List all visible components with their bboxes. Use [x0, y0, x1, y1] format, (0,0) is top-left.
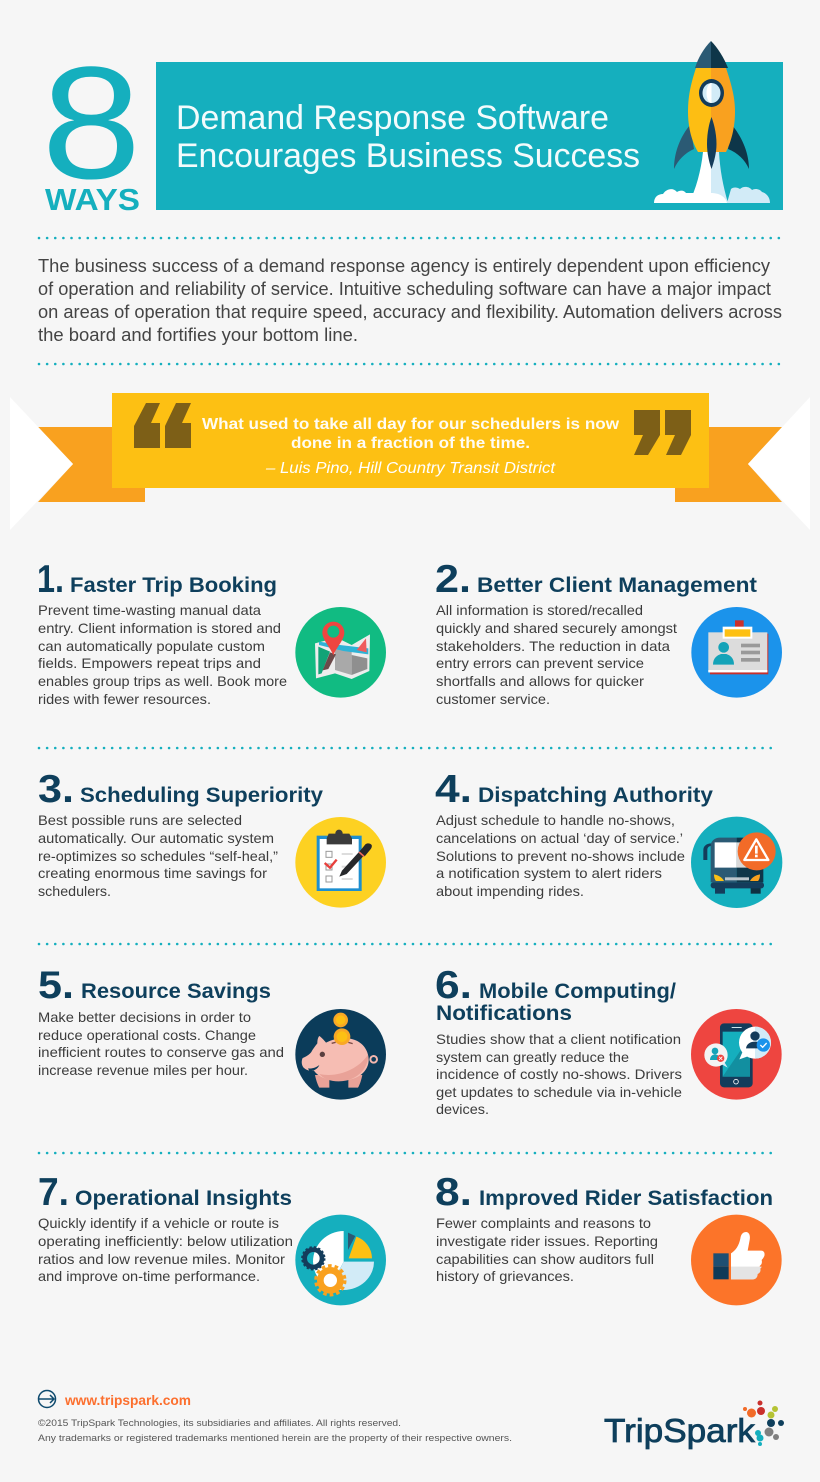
heading: Scheduling Superiority: [80, 783, 323, 807]
section 8: Improved Rider Satisfaction: [435, 1171, 782, 1305]
heading: Dispatching Authority: [478, 783, 713, 807]
body text: Fewer complaints and reasons to: [436, 1215, 651, 1231]
section 5: Resource Savings: [38, 964, 386, 1100]
body text: devices.: [436, 1101, 489, 1117]
section 3: Scheduling Superiority: [38, 768, 386, 908]
icon: clipboard and pen: [295, 817, 386, 908]
body text: [38, 1215, 293, 1284]
heading: Improved Rider Satisfaction: [479, 1186, 773, 1210]
icon: thumbs up: [691, 1215, 782, 1305]
title banner: Demand Response Software: [176, 99, 609, 137]
body text: Make better decisions in order to: [38, 1009, 251, 1025]
body text: inefficient routes to conserve gas and: [38, 1044, 284, 1060]
body text: system can greatly reduce the: [436, 1049, 629, 1065]
copyright text: Any trademarks or registered trademarks mentioned herein are the property of their respective owners.: [38, 1433, 512, 1444]
heading: 2.: [435, 558, 471, 601]
body text: incidence of costly no-shows. Drivers: [436, 1066, 682, 1082]
body text: creating enormous time savings for: [38, 865, 267, 881]
icon: rocket: [654, 41, 770, 203]
body text: operating inefficiently: below utilization: [38, 1233, 293, 1249]
heading: 8.: [435, 1171, 472, 1214]
icon: opening quote mark: [134, 403, 191, 448]
icon: bus with warning: [691, 817, 782, 908]
heading: 5.: [38, 964, 74, 1007]
section 2: Better Client Management: [435, 558, 782, 707]
heading: 1.: [37, 558, 64, 601]
heading: [435, 1171, 773, 1214]
body text: Best possible runs are selected: [38, 812, 242, 828]
ribbon tails: [10, 397, 810, 530]
big numeral 8: 8: [42, 33, 141, 212]
icon: ID card: [691, 607, 782, 698]
intro paragraph: the board and fortifies your bottom line.: [38, 325, 358, 345]
body text: re-optimizes so schedules “self-heal,”: [38, 848, 278, 864]
copyright text: [38, 1418, 512, 1444]
intro paragraph: [38, 256, 782, 345]
icon: map with pin: [295, 607, 386, 698]
icon: pie chart and gears: [295, 1215, 386, 1305]
quote ribbon: [10, 393, 810, 530]
body text: quickly and shared securely amongst: [436, 620, 677, 636]
body text: history of grievances.: [436, 1268, 574, 1284]
body text: can automatically populate custom: [38, 638, 265, 654]
body text: entry errors can prevent service: [436, 655, 644, 671]
intro paragraph: The business success of a demand response agency is entirely dependent upon efficiency: [38, 256, 770, 276]
heading: Mobile Computing/: [479, 979, 676, 1003]
body text: a notification system to alert riders: [436, 865, 662, 881]
body text: Prevent time-wasting manual data: [38, 602, 261, 618]
icon: piggy bank: [295, 1009, 386, 1100]
body text: Solutions to prevent no-shows include: [436, 848, 685, 864]
body text: entry. Client information is stored and: [38, 620, 281, 636]
body text: increase revenue miles per hour.: [38, 1062, 248, 1078]
body text: schedulers.: [38, 883, 111, 899]
body text: Studies show that a client notification: [436, 1031, 681, 1047]
body text: investigate rider issues. Reporting: [436, 1233, 658, 1249]
body text: [436, 1031, 682, 1117]
body text: cancelations on actual ‘day of service.’: [436, 830, 683, 846]
heading: [37, 558, 277, 601]
body text: fields. Empowers repeat trips and: [38, 655, 261, 671]
body text: [38, 812, 278, 899]
body text: capabilities can show auditors full: [436, 1251, 654, 1267]
footer link: www.tripspark.com: [64, 1393, 191, 1408]
body text: ratios and low revenue miles. Monitor: [38, 1251, 285, 1267]
footer link: [38, 1390, 191, 1408]
body text: Adjust schedule to handle no-shows,: [436, 812, 675, 828]
body text: Quickly identify if a vehicle or route is: [38, 1215, 279, 1231]
quote text: [202, 416, 620, 477]
heading: [435, 768, 713, 811]
title banner: [156, 62, 783, 210]
TripSpark logo: TripSpark: [604, 1412, 756, 1449]
quote text: – Luis Pino, Hill Country Transit District: [265, 460, 556, 477]
heading: [38, 768, 323, 811]
quote text: What used to take all day for our schedulers is now: [202, 416, 620, 433]
body text: and improve on-time performance.: [38, 1268, 260, 1284]
heading: [38, 1171, 292, 1214]
TripSpark logo: [604, 1400, 784, 1449]
body text: [38, 1009, 284, 1078]
WAYS label: WAYS: [45, 182, 140, 217]
copyright text: ©2015 TripSpark Technologies, its subsidiaries and affiliates. All rights reserved.: [38, 1418, 401, 1429]
body text: get updates to schedule via in-vehicle: [436, 1084, 682, 1100]
heading: Notifications: [436, 1001, 572, 1025]
ribbon panel: [112, 393, 709, 488]
heading: Resource Savings: [81, 979, 271, 1003]
heading: Better Client Management: [477, 573, 757, 597]
icon: arrow in circle: [38, 1390, 56, 1408]
body text: about impending rides.: [436, 883, 584, 899]
body text: shortfalls and allows for quicker: [436, 673, 644, 689]
section 6: Mobile Computing/Notifications: [435, 964, 782, 1117]
heading: Faster Trip Booking: [70, 573, 277, 597]
body text: All information is stored/recalled: [436, 602, 643, 618]
heading: 3.: [38, 768, 74, 811]
section 7: Operational Insights: [38, 1171, 386, 1305]
heading: [38, 964, 271, 1007]
body text: rides with fewer resources.: [38, 691, 211, 707]
body text: customer service.: [436, 691, 550, 707]
heading: [435, 964, 676, 1025]
section 4: Dispatching Authority: [435, 768, 782, 908]
heading: Operational Insights: [75, 1186, 292, 1210]
heading: 4.: [435, 768, 472, 811]
icon: phone with chat bubbles: [691, 1009, 782, 1100]
body text: [436, 602, 677, 707]
body text: enables group trips as well. Book more: [38, 673, 287, 689]
body text: automatically. Our automatic system: [38, 830, 274, 846]
body text: [436, 1215, 658, 1284]
icon: closing quote mark: [634, 410, 691, 455]
section 1: Faster Trip Booking: [37, 558, 386, 707]
heading: [435, 558, 757, 601]
heading: 7.: [38, 1171, 69, 1214]
intro paragraph: of operation and reliability of service. Intuitive scheduling software can have a major impact: [38, 279, 771, 299]
body text: [436, 812, 685, 899]
body text: stakeholders. The reduction in data: [436, 638, 670, 654]
body text: [38, 602, 287, 707]
title banner: Encourages Business Success: [176, 137, 640, 175]
body text: reduce operational costs. Change: [38, 1027, 256, 1043]
heading: 6.: [435, 964, 472, 1007]
intro paragraph: on areas of operation that require speed, accuracy and flexibility. Automation delivers across: [38, 302, 782, 322]
quote text: done in a fraction of the time.: [291, 435, 530, 452]
